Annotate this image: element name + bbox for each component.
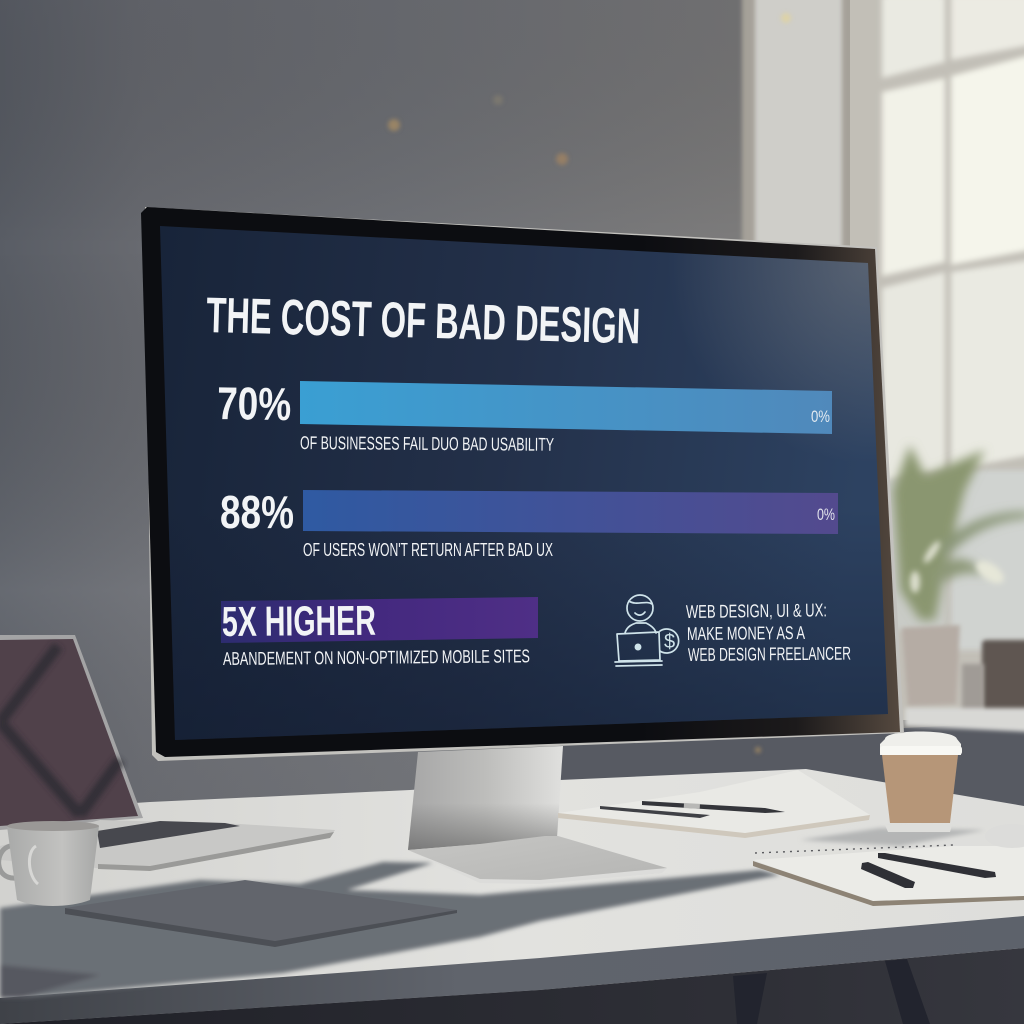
keyboard [97,821,240,848]
course promo [615,595,851,666]
stat value: 88% [220,486,294,538]
back notepad with pens [558,770,870,838]
promo text [686,599,851,665]
front notebook with pens [753,845,1024,906]
stat description: OF BUSINESSES FAIL DUO BAD USABILITY [300,432,554,455]
stat block: 5X higher [221,597,538,669]
title: THE COST OF BAD DESIGN [206,287,641,354]
desk shadow [0,828,985,998]
highlight bar [221,597,538,643]
bar end label: 0% [817,505,835,524]
laptop [0,635,335,871]
tablet [65,880,457,947]
pen [861,862,915,888]
icon: blurred bokeh lights [388,13,791,753]
promo text: MAKE MONEY AS A [687,622,805,644]
potted plant [893,445,1024,732]
monitor bezel [141,207,904,761]
computer mouse [985,824,1024,848]
monitor [141,207,904,761]
pencil [600,806,710,818]
coffee cup [880,732,962,832]
stand foot [408,836,667,883]
window with light [742,0,1024,720]
progress bar [300,381,832,434]
stat description: ABANDEMENT ON NON-OPTIMIZED MOBILE SITES [223,645,530,669]
stat row: 88% [220,486,838,560]
pen [878,853,996,878]
bar end label: 0% [811,407,830,426]
desk legs [733,959,930,1024]
stat value: 5X HIGHER [222,597,376,645]
progress bar [303,490,838,534]
stat row: 70% [217,377,832,455]
icon: freelancer at laptop with dollar coin [615,595,679,666]
stat description: OF USERS WON'T RETURN AFTER BAD UX [303,539,553,560]
laptop base [0,820,335,870]
pen [642,801,785,813]
stand neck [408,746,563,850]
monitor stand [408,746,667,884]
stat value: 70% [217,377,292,430]
monitor screen [160,226,888,740]
promo text: WEB DESIGN, UI & UX: [686,599,827,622]
icon: freelancer at laptop with dollar coin: $ [664,631,675,653]
promo text: WEB DESIGN FREELANCER [688,643,851,665]
laptop lid [0,635,143,830]
coffee mug [0,821,99,906]
desk [0,769,1024,1024]
